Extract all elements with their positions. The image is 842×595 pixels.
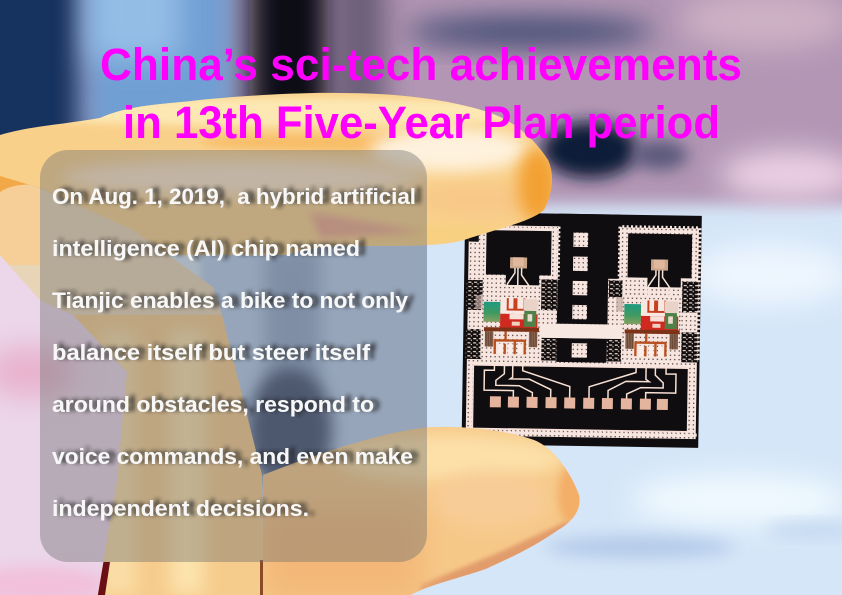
logic block left xyxy=(475,294,541,359)
title: in 13th Five-Year Plan period xyxy=(123,97,720,148)
body text: voice commands, and even make xyxy=(52,444,413,469)
second finger xyxy=(0,170,270,595)
body text: On Aug. 1, 2019, a hybrid artificial xyxy=(52,184,416,209)
title: China’s sci-tech achievements xyxy=(100,39,742,90)
title xyxy=(100,39,742,148)
body text: balance itself but steer itself xyxy=(52,340,371,365)
lower thumb xyxy=(260,420,590,595)
antenna feed right xyxy=(648,259,670,298)
body text: around obstacles, respond to xyxy=(52,392,374,417)
black field regions xyxy=(467,212,692,364)
antenna feed left xyxy=(507,257,529,296)
body text xyxy=(52,184,416,521)
body text: Tianjic enables a bike to not only xyxy=(52,288,408,313)
connecting bus xyxy=(540,324,623,339)
lower pad field xyxy=(472,362,688,432)
dotted metal layer xyxy=(466,225,699,439)
translucent text panel xyxy=(40,150,427,562)
body text: intelligence (AI) chip named xyxy=(52,236,360,261)
antenna frame teeth xyxy=(466,224,700,435)
logic block right xyxy=(615,297,682,362)
upper thumb xyxy=(0,85,560,255)
orange ridge on left finger xyxy=(0,169,42,192)
contact squares xyxy=(572,233,589,358)
sparse routing areas xyxy=(466,278,699,363)
chip substrate xyxy=(462,212,702,448)
body text: independent decisions. xyxy=(52,496,309,521)
AI chip xyxy=(462,212,702,448)
lilac blurred hand at left xyxy=(0,250,130,595)
